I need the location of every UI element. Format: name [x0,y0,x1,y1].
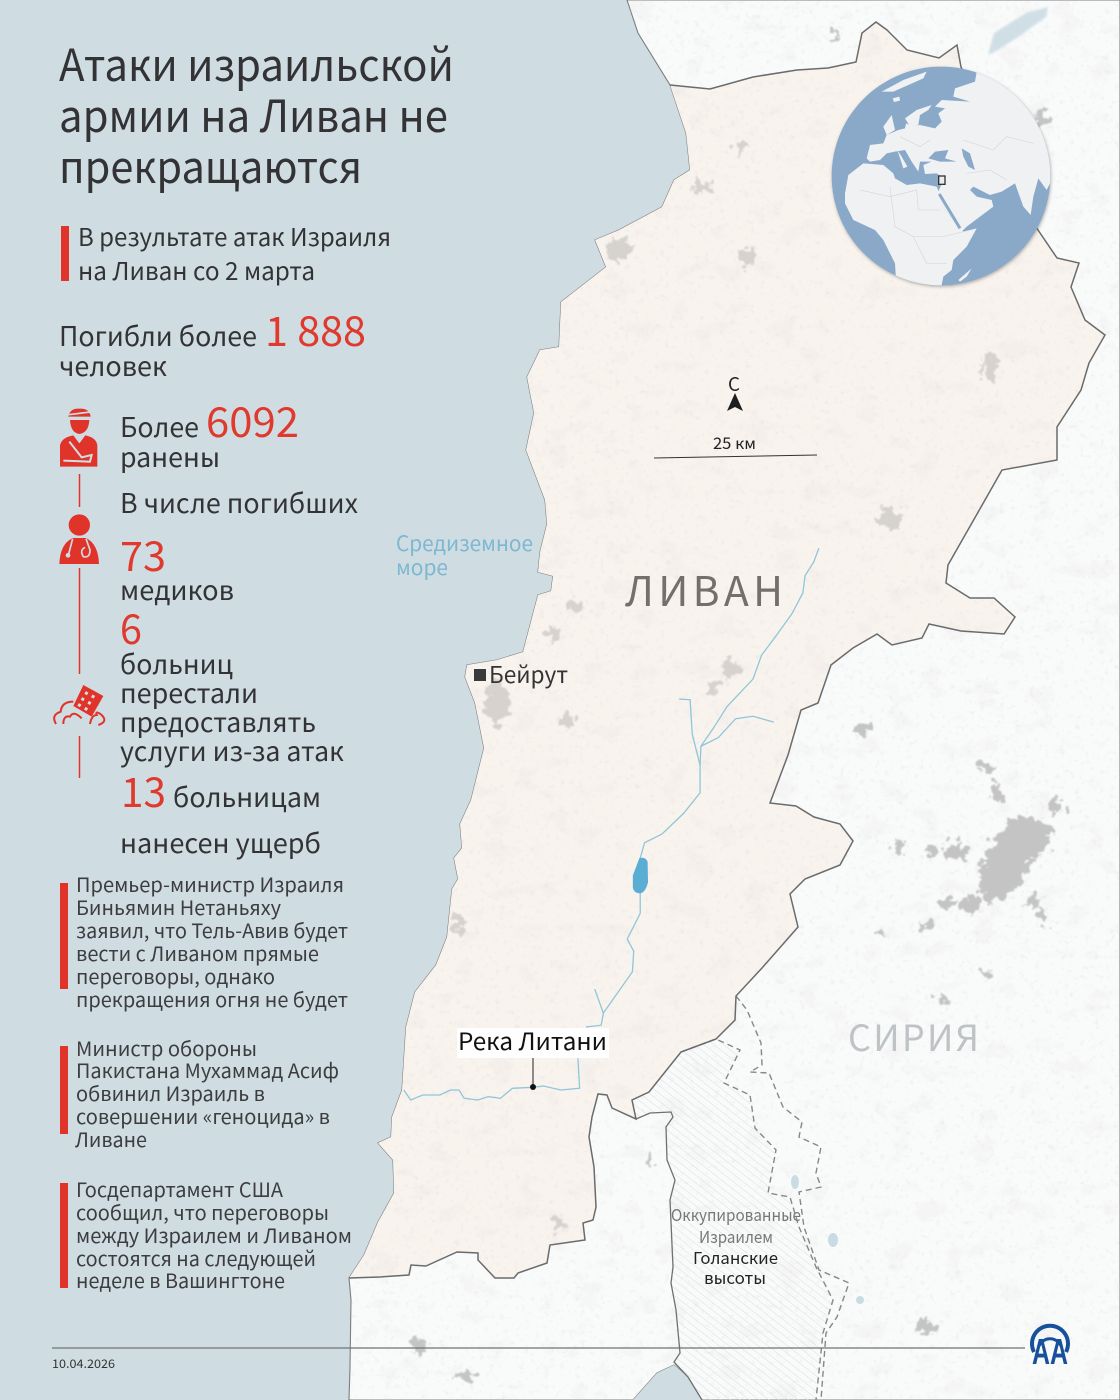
label: Golan Heights occupied by Israel: Голанские [693,1245,778,1269]
stat: medics: медиков [120,569,234,608]
map: Israel and Golan borders [636,1112,702,1400]
text block: US State Department: неделе в Вашингтоне [76,1265,285,1294]
text block: US State Department: Госдепартамент США [76,1174,284,1203]
subheading: among the dead: В числе погибших [120,482,359,521]
text block: Netanyahu: вести с Ливаном прямые [76,938,319,967]
stat: hospitals damaged [120,759,321,861]
north arrow: С [728,370,740,397]
connector line [78,568,80,674]
stat: medics [120,523,234,608]
title: прекращаются [59,132,362,196]
map: Litani river upper course [586,548,819,1027]
text block: Pakistan defence minister: Пакистана Мухаммад Асиф [76,1055,339,1084]
label: Golan Heights occupied by Israel: высоты [704,1265,766,1289]
locator globe [832,67,1060,290]
text block: Pakistan defence minister: Министр обороны [76,1033,257,1062]
icon: wounded person [60,409,97,467]
stat: killed [59,298,366,384]
scale bar [654,430,817,458]
map: occupied Golan Heights hatched area [632,996,849,1400]
label: Mediterranean Sea: море [396,552,448,582]
map: neighbouring land [349,0,1120,1400]
stat: wounded [120,389,299,475]
stat: killed: Погибли более [59,315,257,354]
logo: Anadolu Agency [1032,1326,1068,1372]
text block: Pakistan defence minister: обвинил Израиль в [76,1078,265,1107]
stat: wounded: ранены [120,436,220,475]
stat: hospitals damaged: 13 [121,759,166,819]
connector line [78,474,80,507]
text block: Netanyahu [60,869,348,1013]
label: Golan Heights occupied by Israel: Оккупированные [671,1202,801,1226]
map: Lake Tiberias [633,1365,702,1400]
stat: hospitals out of service: услуги из-за атак [120,730,344,769]
map: Lebanon border [349,22,1105,1278]
stat: hospitals out of service: 6 [120,596,142,656]
text block: Pakistan defence minister: совершении «геноцида» в [76,1101,330,1130]
label: Golan Heights occupied by Israel [671,1202,801,1289]
stat: killed: 1 888 [265,298,366,358]
label: Lebanon: ЛИВАН [625,558,783,618]
footer rule [52,1347,1025,1349]
stat: wounded: Более [120,406,199,445]
label: Beirut: Бейрут [489,656,568,690]
title [59,30,454,196]
text block: Pakistan defence minister [60,1033,339,1153]
map: Lebanon territory [349,22,1105,1278]
north arrow [727,370,743,411]
stat: hospitals out of service [120,596,344,769]
text block: Netanyahu: прекращения огня не будет [76,984,348,1013]
text block: Netanyahu: переговоры, однако [76,961,275,990]
text block: US State Department [60,1174,352,1294]
stat: medics: 73 [120,523,166,583]
map: terrain speckle [340,0,1120,1400]
title: Атаки израильской [59,30,454,94]
logo: Anadolu Agency: AA [1032,1331,1068,1372]
intro text: на Ливан со 2 марта [78,253,315,288]
date: 10.04.2026 [52,1355,115,1372]
text block: Netanyahu: Биньямин Нетаньяху [76,892,282,921]
stat: wounded: 6092 [206,389,299,449]
intro text: В результате атак Израиля [78,219,391,254]
text block: US State Department: между Израилем и Ливаном [76,1220,352,1249]
label: Mediterranean Sea: Средиземное [396,528,533,558]
label: Litani River [457,1022,609,1090]
stat: killed: человек [59,345,167,384]
stat: hospitals damaged: нанесен ущерб [120,822,321,861]
map: Litani river lower course [404,1058,580,1100]
label: Mediterranean Sea [396,528,533,582]
map: Qaraoun lake [633,858,648,893]
text block: US State Department: сообщил, что переговоры [76,1197,329,1226]
stat: hospitals out of service: больниц [120,643,233,682]
icon: destroyed hospital [54,685,104,725]
icon: medic [59,514,99,564]
scale bar: 25 км [713,430,756,454]
text block: US State Department: состоятся на следующей [76,1243,316,1272]
intro text [61,219,391,288]
stat: hospitals out of service: предоставлять [120,701,316,740]
text block: Pakistan defence minister: Ливане [75,1124,147,1153]
label: Syria: СИРИЯ [848,1010,979,1062]
connector line [78,736,80,778]
label: Litani River: Река Литани [458,1022,607,1057]
text block: Netanyahu: заявил, что Тель-Авив будет [76,915,348,944]
stat: hospitals out of service: перестали [120,672,258,711]
stat: hospitals damaged: больницам [173,776,321,815]
label: Golan Heights occupied by Israel: Израилем [699,1224,773,1248]
title: армии на Ливан не [59,81,448,145]
text block: Netanyahu: Премьер-министр Израиля [76,869,344,898]
